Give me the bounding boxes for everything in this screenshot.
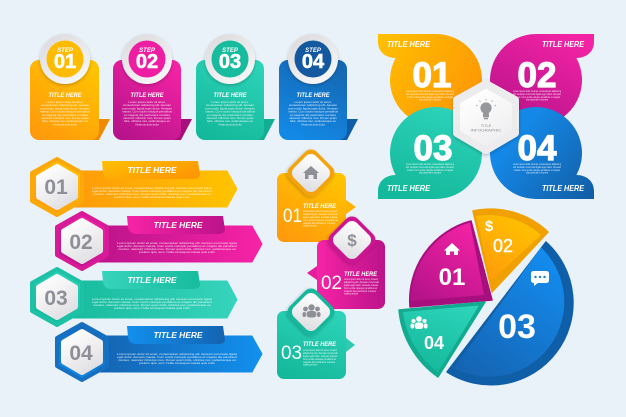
petal 03: elit. Aenean commodo ligula eget dolor. Aenean (406, 165, 454, 169)
panel: banner 02 (57, 213, 262, 269)
panel: step 04 card: TITLE HERE (296, 92, 330, 99)
panel: speech card 02: nascetur (344, 292, 358, 296)
petal 02: TITLE HERE (542, 40, 585, 49)
panel: speech card 03: magnis dis parturient montes (303, 360, 335, 364)
petal 03: massa. Cum sociis natoque penatibus et magnis (407, 168, 453, 172)
panel: step 02 card: felis, ultricies nec, pellentesque eu (124, 119, 170, 123)
petal 02: 02 (518, 56, 556, 95)
panel: speech card 03: 03 (281, 343, 302, 364)
center hexagon: INFOGRAPHIC (470, 128, 502, 132)
panel: step 01 card: Vivamus quis dolor (53, 122, 77, 126)
panel: step 01 card (30, 34, 110, 140)
petal 04: dis parturient montes (526, 170, 548, 174)
panel: step 04 card: Vivamus quis dolor (301, 122, 325, 126)
panel: speech card 02: adipiscing elit. Aenean commodo (344, 280, 379, 284)
panel: step 02 card: massa. Cum sociis natoque penatibus (122, 110, 172, 114)
slice 01: 01 (439, 264, 465, 291)
icon: people (410, 316, 428, 329)
petal 02: Lorem ipsum dolor sit amet, consectetuer adipiscing (513, 89, 561, 93)
slice 03: 03 (498, 308, 536, 346)
panel: banner 03: Lorem ipsum dolor sit amet, consectetuer adipiscing elit. Aenean commodo ligula (92, 297, 212, 301)
panel: step 02 card: Lorem ipsum dolor sit amet, (128, 100, 166, 104)
petal 01: massa. Cum sociis natoque penatibus et magnis (407, 95, 453, 99)
panel: banner 04: TITLE HERE (154, 331, 203, 340)
panel: step 02 card: Vivamus quis dolor (135, 122, 159, 126)
panel: step 03 card: commodo ligula eget dolor. Aenean (205, 106, 255, 110)
center hexagon: TITLE (481, 124, 492, 128)
panel: step 01 card: 01 (54, 51, 76, 73)
petal 02: elit. Aenean commodo ligula eget dolor. Aenean (513, 92, 561, 96)
petal 04: elit. Aenean commodo ligula eget dolor. Aenean (513, 165, 561, 169)
panel: banner 02: TITLE HERE (154, 221, 203, 230)
panel: step 03 card: felis, ultricies nec, pellentesque eu (207, 119, 253, 123)
icon: chat bubble (531, 271, 549, 286)
panel: step 04 card: 04 (302, 51, 325, 73)
petal 02: dis parturient montes (526, 98, 548, 102)
panel: banner 02: pretium quis, sem. Nulla consequat massa quis enim (139, 250, 216, 254)
panel: step 04 card: commodo ligula eget dolor. Aenean (288, 106, 338, 110)
petal 01 (378, 34, 482, 126)
panel: speech card 01: ligula eget dolor. Aenean massa (303, 215, 337, 219)
petal 04: TITLE HERE (542, 184, 585, 193)
petal 03 (378, 107, 482, 199)
icon: dollar: $ (347, 231, 357, 250)
petal 03: 03 (414, 129, 452, 168)
panel: step 02 card: commodo ligula eget dolor. Aenean (122, 106, 172, 110)
panel: banner 04: 04 (69, 342, 93, 365)
panel: step 02 card: nascetur ridiculus mus. Donec quam (123, 116, 171, 120)
panel: step 03 card: STEP (222, 48, 239, 54)
panel: step 04 card: nascetur ridiculus mus. Donec quam (289, 116, 337, 120)
panel: step 04 card: Lorem ipsum dolor sit amet, (294, 100, 332, 104)
panel: banner 02: eget dolor. Aenean massa. Cum sociis natoque penatibus et magnis dis parturient (117, 244, 237, 248)
slice 04: 04 (424, 333, 444, 353)
panel: speech card 03: Cum sociis natoque penatibus et (303, 357, 336, 361)
panel: speech card 03: nascetur (303, 362, 317, 366)
panel: four-petal title infographic (378, 34, 594, 199)
panel: banner 01: Lorem ipsum dolor sit amet, consectetuer adipiscing elit. Aenean commodo ligula (92, 186, 212, 190)
slice 01 (410, 221, 492, 307)
panel: step 04 card: et magnis dis parturient montes (290, 113, 337, 117)
panel: speech card 02: magnis dis parturient montes (344, 289, 376, 293)
petal 03: Lorem ipsum dolor sit amet, consectetuer adipiscing (406, 162, 454, 166)
panel: pie chart (399, 209, 573, 385)
panel: step 01 card: TITLE HERE (48, 92, 82, 99)
panel: speech card 01: adipiscing elit. Aenean commodo (303, 212, 338, 216)
icon: people (302, 304, 320, 318)
petal 03: TITLE HERE (387, 184, 431, 193)
panel: banner 01: montes, nascetur ridiculus mus. Donec quam felis, ultricies nec, pellentesque eu (93, 192, 211, 196)
petal 04 (490, 107, 594, 199)
panel: banner 03: TITLE HERE (128, 276, 177, 285)
panel: speech card 01: TITLE HERE (303, 204, 337, 210)
panel: banner 01 (32, 159, 237, 215)
petal 04: 04 (518, 129, 557, 168)
panel: speech card 02: TITLE HERE (344, 272, 378, 278)
panel: banner 02: 02 (69, 231, 93, 254)
panel: step 03 card: consectetuer adipiscing elit. Aenean (206, 103, 254, 107)
panel: step 03 card: 03 (219, 51, 241, 73)
center hexagon (457, 84, 515, 150)
panel: speech card 02: 02 (321, 273, 342, 294)
panel: step 01 card: consectetuer adipiscing elit. Aenean (41, 103, 89, 107)
petal 03: dis parturient montes (419, 170, 441, 174)
panel: step 03 card: TITLE HERE (214, 92, 247, 99)
icon: house (303, 166, 319, 179)
panel: speech card 02 (307, 213, 385, 309)
panel: banner 04: montes, nascetur ridiculus mus. Donec quam felis, ultricies nec, pellentesque eu (118, 358, 236, 362)
panel: speech card 01: magnis dis parturient montes (303, 221, 335, 225)
slice 02: 02 (493, 236, 513, 256)
panel: speech card 03 (277, 285, 355, 379)
panel: step 04 card: consectetuer adipiscing elit. Aenean (289, 103, 337, 107)
panel: step 01 card: Lorem ipsum dolor sit amet, (46, 100, 84, 104)
panel: step 04 card: felis, ultricies nec, pellentesque eu (290, 119, 336, 123)
panel: speech card 02: Cum sociis natoque penatibus et (344, 286, 377, 290)
panel: step 04 card (279, 34, 358, 140)
panel: banner 03 (32, 269, 237, 325)
panel: banner 04: pretium quis, sem. Nulla consequat massa quis enim (139, 361, 216, 365)
petal 04: massa. Cum sociis natoque penatibus et magnis (514, 168, 560, 172)
petal 01: Lorem ipsum dolor sit amet, consectetuer adipiscing (406, 89, 454, 93)
panel: banner 03: eget dolor. Aenean massa. Cum sociis natoque penatibus et magnis dis parturient (92, 300, 212, 304)
panel: step 01 card: massa. Cum sociis natoque penatibus (40, 110, 90, 114)
panel: step 01 card: commodo ligula eget dolor. Aenean (40, 106, 90, 110)
panel: step 01 card: felis, ultricies nec, pellentesque eu (42, 119, 88, 123)
panel: step 02 card: STEP (139, 48, 156, 54)
panel: step 01 card: STEP (57, 48, 74, 54)
panel: speech card 02: ligula eget dolor. Aenean massa (344, 283, 378, 287)
panel: speech card 01: Lorem ipsum dolor sit amet, consect (303, 209, 337, 213)
petal 01: elit. Aenean commodo ligula eget dolor. Aenean (406, 92, 454, 96)
panel: banner 02: Lorem ipsum dolor sit amet, consectetuer adipiscing elit. Aenean commodo ligula (117, 241, 237, 245)
panel: banner 03: pretium quis, sem. Nulla consequat massa quis enim (114, 306, 191, 310)
panel: speech card 03: Lorem ipsum dolor sit amet, consect (303, 348, 337, 352)
panel: banner 04 (57, 324, 262, 380)
panel: step 03 card (196, 34, 275, 140)
slice 04 (399, 302, 485, 377)
panel: step 03 card: Vivamus quis dolor (218, 122, 242, 126)
panel: banner 01: eget dolor. Aenean massa. Cum sociis natoque penatibus et magnis dis parturient (92, 189, 212, 193)
panel: step 04 card: massa. Cum sociis natoque penatibus (288, 110, 338, 114)
panel: step 03 card: massa. Cum sociis natoque penatibus (205, 110, 255, 114)
panel: step 02 card: consectetuer adipiscing elit. Aenean (123, 103, 171, 107)
panel: step 03 card: et magnis dis parturient montes (207, 113, 254, 117)
panel: step 02 card: TITLE HERE (130, 92, 164, 99)
panel: banner 01: 01 (44, 176, 68, 199)
icon: light bulb (476, 99, 496, 119)
panel: banner 03: montes, nascetur ridiculus mus. Donec quam felis, ultricies nec, pellentesque eu (93, 303, 211, 307)
panel: step 03 card: Lorem ipsum dolor sit amet, (211, 100, 249, 104)
panel: banner 03: 03 (44, 287, 68, 310)
panel: speech card 02: Lorem ipsum dolor sit amet, consect (344, 277, 378, 281)
panel: banner 04: eget dolor. Aenean massa. Cum sociis natoque penatibus et magnis dis parturient (117, 355, 237, 359)
panel: step 01 card: et magnis dis parturient montes (42, 113, 89, 117)
panel: speech card 03: TITLE HERE (303, 342, 337, 348)
panel: speech card 03: adipiscing elit. Aenean commodo (303, 351, 338, 355)
petal 02: massa. Cum sociis natoque penatibus et magnis (514, 95, 560, 99)
panel: step 02 card: et magnis dis parturient montes (124, 113, 171, 117)
icon: dollar: $ (485, 218, 494, 235)
panel: banner 01: TITLE HERE (128, 166, 177, 175)
petal 01: 01 (413, 56, 451, 95)
petal 04: Lorem ipsum dolor sit amet, consectetuer adipiscing (513, 162, 561, 166)
panel: step 04 card: STEP (305, 48, 322, 54)
panel: step 03 card: nascetur ridiculus mus. Donec quam (206, 116, 254, 120)
panel: speech card 01: Cum sociis natoque penatibus et (303, 218, 338, 222)
panel: speech card 01: nascetur (303, 224, 317, 228)
panel: speech card 01 (277, 146, 356, 242)
panel: speech card 01: 01 (283, 206, 302, 227)
panel: banner 04: Lorem ipsum dolor sit amet, consectetuer adipiscing elit. Aenean commodo ligula (117, 352, 237, 356)
petal 02 (490, 34, 594, 126)
panel: step 01 card: nascetur ridiculus mus. Donec quam (41, 116, 89, 120)
panel: step 02 card: 02 (136, 51, 158, 73)
petal 01: dis parturient montes (419, 98, 441, 102)
slice 03 (447, 242, 573, 385)
petal 01: TITLE HERE (387, 40, 431, 49)
icon: house (444, 243, 460, 255)
panel: speech card 03: ligula eget dolor. Aenean massa (303, 354, 337, 358)
panel: banner 02: montes, nascetur ridiculus mus. Donec quam felis, ultricies nec, pellentesque eu (118, 247, 236, 251)
slice 02 (473, 209, 548, 292)
panel: step 02 card (113, 34, 192, 140)
panel: banner 01: pretium quis, sem. Nulla consequat massa quis enim (114, 195, 191, 199)
